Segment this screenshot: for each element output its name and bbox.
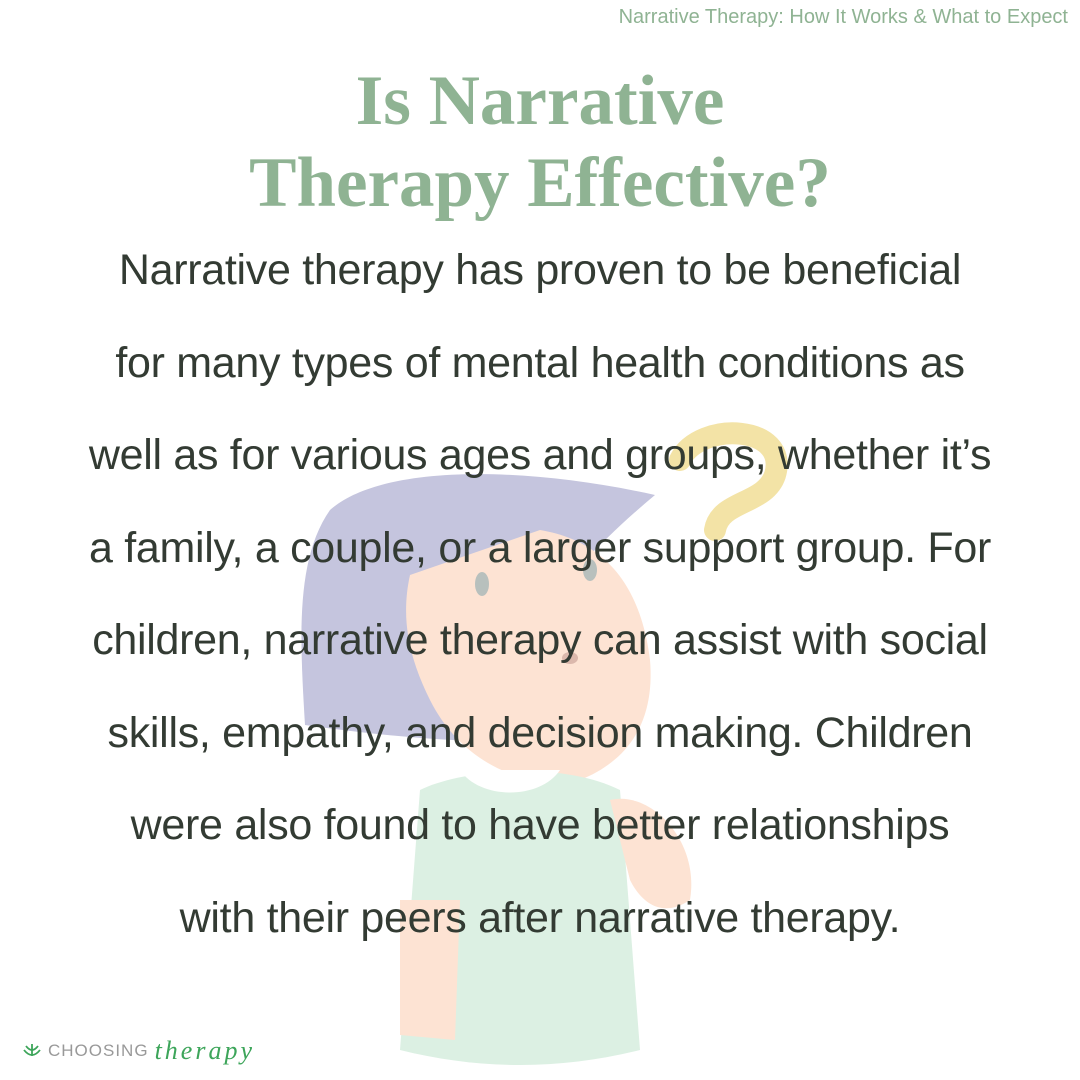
title: Is Narrative xyxy=(356,62,724,140)
body text: for many types of mental health conditions as xyxy=(115,339,965,387)
body text: were also found to have better relationships xyxy=(131,801,949,849)
logo: CHOOSING xyxy=(48,1041,149,1060)
logo xyxy=(23,1036,255,1065)
title: Therapy Effective? xyxy=(249,144,831,222)
hair xyxy=(301,474,655,741)
header tagline: Narrative Therapy: How It Works & What to Expect xyxy=(619,6,1068,28)
body text: children, narrative therapy can assist with social xyxy=(92,616,988,664)
icon: leaf xyxy=(23,1044,41,1056)
title xyxy=(249,62,831,222)
face xyxy=(406,530,651,782)
body text: well as for various ages and groups, whether it’s xyxy=(89,431,991,479)
body text: Narrative therapy has proven to be beneficial xyxy=(119,246,961,294)
question mark xyxy=(680,433,777,530)
body text: skills, empathy, and decision making. Children xyxy=(108,709,972,757)
body text: a family, a couple, or a larger support group. For xyxy=(89,524,991,572)
shirt xyxy=(400,770,640,1065)
logo: therapy xyxy=(155,1036,255,1065)
body text: with their peers after narrative therapy. xyxy=(180,894,900,942)
arms xyxy=(400,799,691,1040)
